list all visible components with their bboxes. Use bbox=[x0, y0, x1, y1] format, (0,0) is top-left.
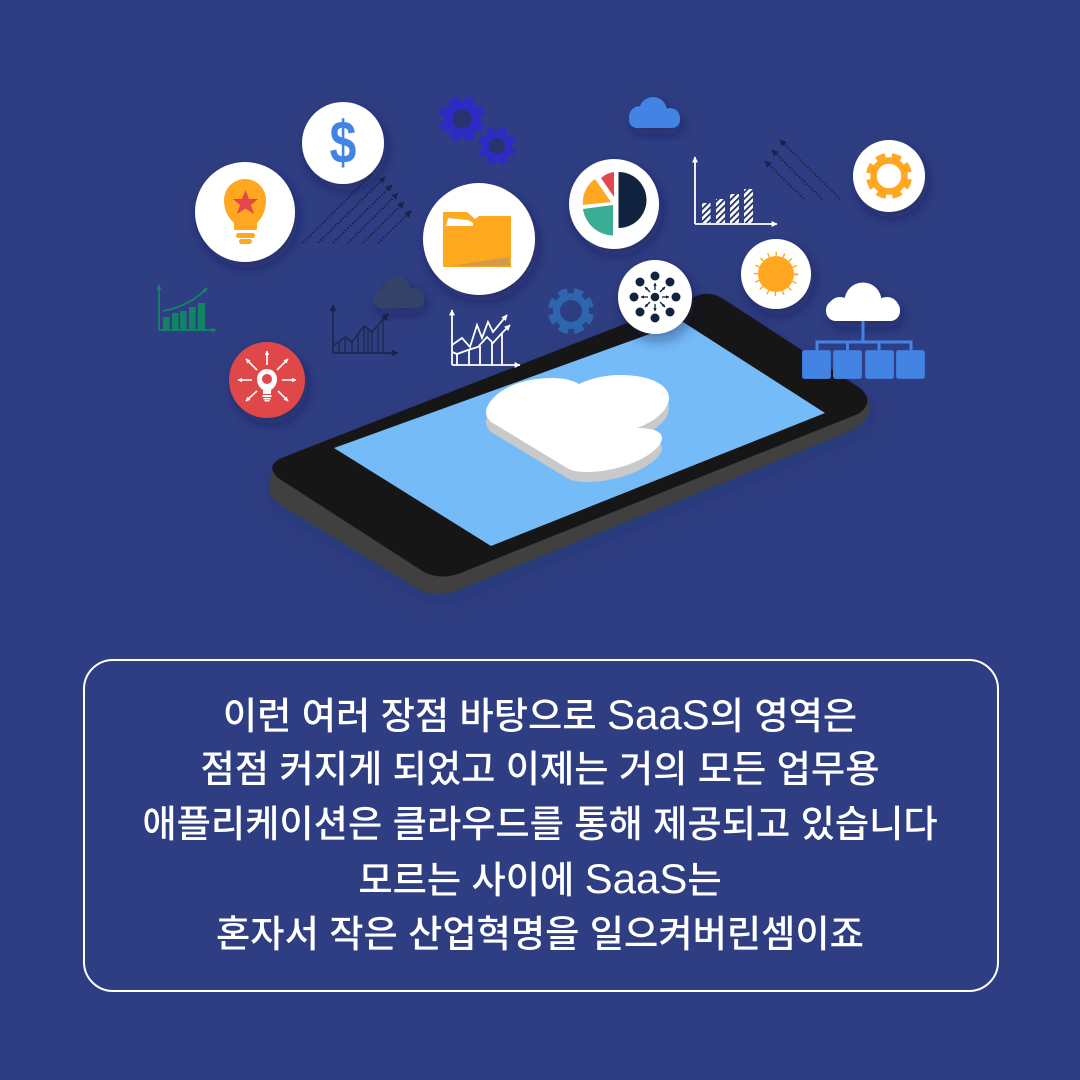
icon: radial network bbox=[618, 260, 692, 334]
panel text bbox=[142, 691, 938, 955]
text panel bbox=[82, 658, 998, 992]
chart: dark area line bbox=[333, 305, 398, 353]
bar chart: white hatched bars bbox=[695, 157, 777, 224]
text line 2: 점점 커지게 되었고 이제는 거의 모든 업무용 bbox=[201, 748, 879, 790]
icon: steel blue gear bbox=[551, 291, 591, 331]
chart: white double line bbox=[452, 310, 520, 365]
icon: dark cloud bbox=[373, 276, 424, 308]
icon: dollar: $ bbox=[330, 109, 356, 176]
dotted arrows rising right bbox=[303, 174, 411, 243]
icon: light bulb with star bbox=[195, 162, 295, 262]
text line 3: 애플리케이션은 클라우드를 통해 제공되고 있습니다 bbox=[142, 803, 938, 845]
dotted arrows rising left bbox=[765, 140, 840, 199]
text line 5: 혼자서 작은 산업혁명을 일으켜버린셈이죠 bbox=[216, 913, 864, 955]
icon: orange gear bbox=[853, 140, 925, 212]
icon: dollar bbox=[302, 102, 384, 184]
illustration: phone and cloud service icons bbox=[156, 96, 931, 596]
text line 4: 모르는 사이에 SaaS는 bbox=[358, 855, 722, 902]
icon: sun bbox=[741, 239, 811, 309]
icon: blue gears bbox=[442, 99, 514, 162]
icon: red idea bulb bbox=[229, 342, 305, 418]
phone bbox=[269, 294, 870, 594]
text line 1: 이런 여러 장점 바탕으로 SaaS의 영역은 bbox=[223, 691, 857, 738]
icon: blue cloud bbox=[629, 97, 680, 128]
phone screen cloud bbox=[486, 375, 669, 482]
chart: green bars and trend bbox=[159, 285, 216, 330]
icon: pie chart bbox=[569, 159, 659, 249]
icon: network cloud bbox=[802, 282, 924, 378]
icon: folder bbox=[423, 183, 535, 295]
